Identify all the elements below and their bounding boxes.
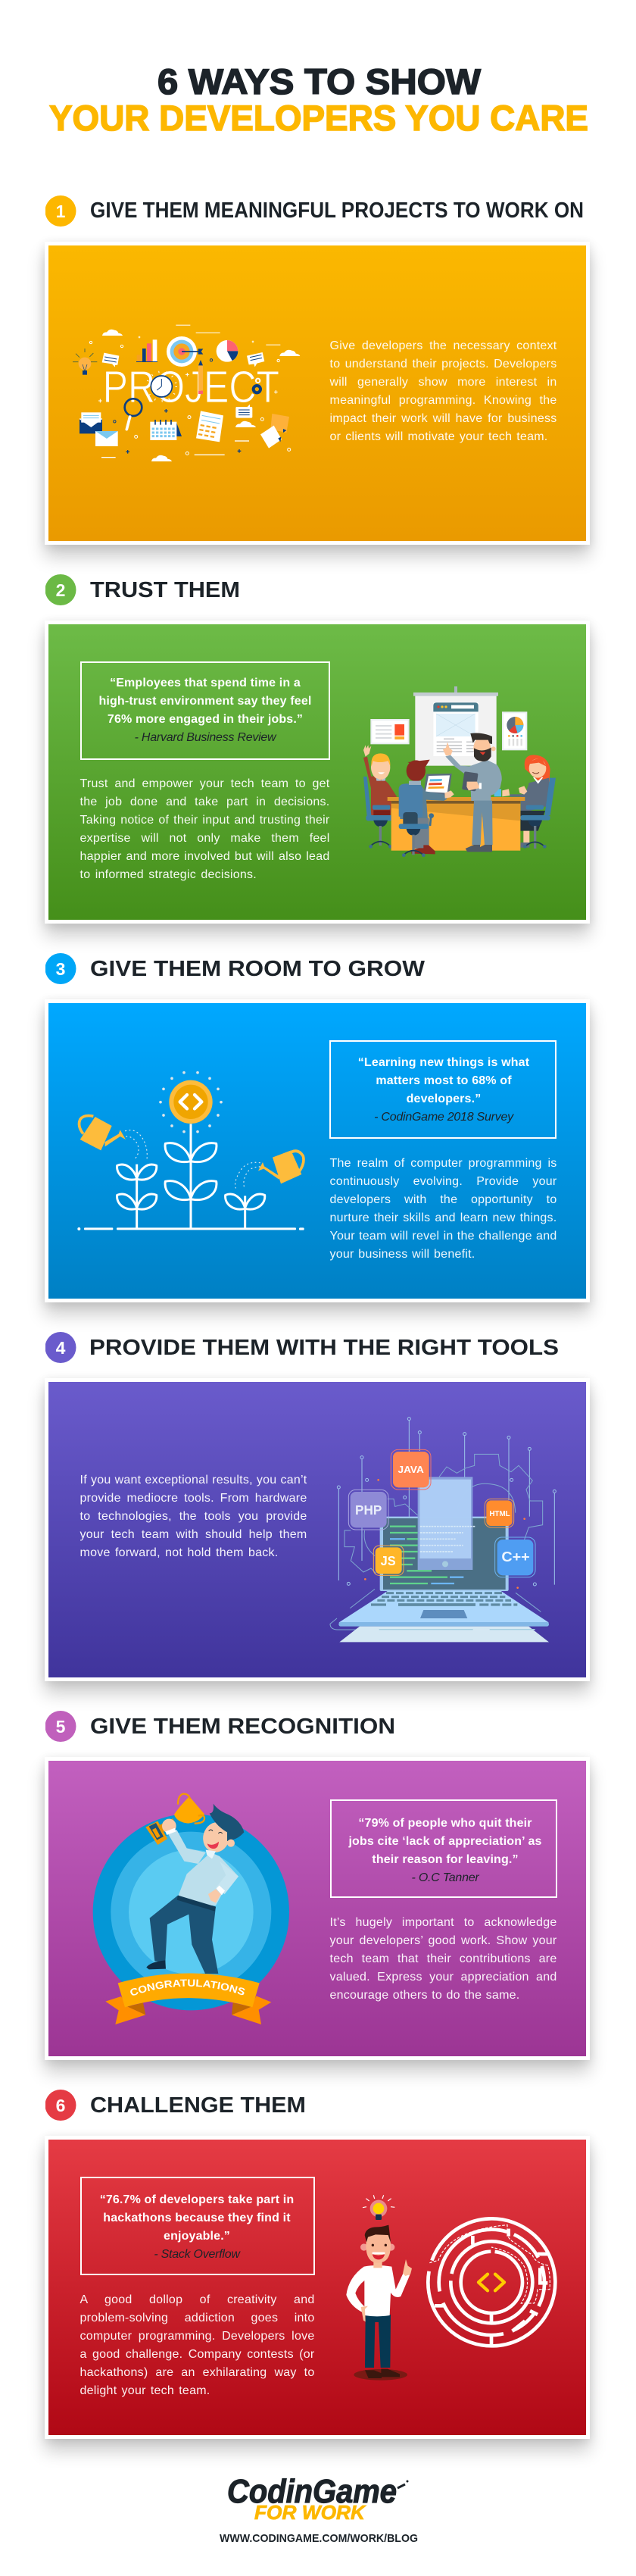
body text 1: meaningful programming. Knowing the	[330, 394, 557, 407]
panel 4: tools	[45, 1378, 590, 1681]
panel 1: projects	[45, 242, 590, 545]
heading 2	[45, 574, 240, 605]
pencil	[198, 360, 203, 394]
badges	[391, 1449, 431, 1490]
illustration: laptop and languages: PHP	[355, 1502, 382, 1518]
body text 1: Give developers the necessary context	[330, 339, 557, 352]
illustration: laptop and languages: HTML	[489, 1510, 510, 1518]
badges: JAVA	[398, 1465, 424, 1475]
code brackets	[479, 2274, 504, 2290]
phone	[418, 1477, 475, 1570]
heading 1: 1	[56, 202, 66, 221]
body text 4: move forward, not hold them back.	[80, 1546, 279, 1559]
laptop	[338, 1517, 549, 1642]
body text 4: your tech team with should help them	[80, 1528, 307, 1541]
body text 1	[330, 339, 557, 443]
illustration: trophy winner	[92, 1793, 289, 2024]
body text 2	[80, 777, 330, 881]
body text 3: continuously evolving. Provide your	[330, 1175, 557, 1188]
body text 4	[80, 1474, 307, 1559]
heading 2: TRUST THEM	[90, 578, 240, 602]
illustration: growing plants	[77, 1071, 305, 1230]
plants	[117, 1124, 265, 1228]
title: 6 WAYS TO SHOW	[157, 61, 482, 102]
tablet on desk	[423, 774, 452, 796]
bars	[136, 339, 157, 362]
footer logo	[220, 2473, 418, 2545]
footer logo: WWW.CODINGAME.COM/WORK/BLOG	[220, 2532, 418, 2545]
bulb	[73, 349, 97, 375]
quote 5: jobs cite ‘lack of appreciation’ as	[348, 1835, 542, 1848]
quote 6: “76.7% of developers take part in	[100, 2193, 294, 2206]
illustration: team meeting	[363, 686, 556, 857]
target	[167, 336, 203, 367]
quote 6: hackathons because they find it	[103, 2212, 291, 2224]
code lines	[390, 1527, 463, 1583]
quote 2: 76% more engaged in their jobs.”	[108, 713, 303, 726]
quote 5	[348, 1817, 542, 1884]
quote 6: enjoyable.”	[164, 2230, 230, 2243]
body text 2: happier and more involved but will also lead	[80, 850, 330, 863]
quote 2: high-trust environment say they feel	[98, 695, 312, 708]
quote 2: - Harvard Business Review	[135, 731, 276, 744]
ground	[77, 1227, 304, 1230]
body text 5: encourage others to do the same.	[330, 1989, 519, 2002]
gears	[254, 379, 260, 392]
quote 5: - O.C Tanner	[412, 1871, 479, 1884]
bubbles	[102, 353, 119, 367]
quote 6: - Stack Overflow	[154, 2248, 240, 2261]
body text 5: your developers’ good work. Show your	[330, 1934, 557, 1947]
body text 4: to technologies, the tools you provide	[80, 1510, 307, 1523]
body text 5: tech team that their contributions are	[330, 1952, 557, 1965]
body text 3: your business will benefit.	[330, 1248, 475, 1261]
document	[196, 411, 223, 442]
circuit lines	[330, 1418, 556, 1630]
envelopes	[80, 412, 118, 446]
body text 1: to understand their projects. Developers	[330, 358, 557, 370]
body text 1: or clients will motivate your tech team.	[330, 430, 548, 443]
desk	[388, 797, 525, 851]
seated person back	[399, 760, 454, 857]
heading 5: 5	[56, 1717, 66, 1737]
PROJECT word: PROJECT	[103, 361, 279, 412]
quote box 5	[330, 1799, 557, 1898]
ribbon: CONGRATULATIONS	[130, 1979, 245, 1996]
panel 5: recognition	[45, 1757, 590, 2060]
left person	[363, 745, 397, 849]
quote 3: developers.”	[407, 1093, 481, 1105]
bulb	[363, 2195, 394, 2220]
quote box 2	[80, 661, 330, 760]
heading 3: 3	[56, 959, 65, 979]
heading 6: 6	[56, 2096, 65, 2115]
quote 3: “Learning new things is what	[358, 1056, 529, 1069]
body text 5: valued. Express your appreciation and	[330, 1971, 557, 1984]
left watering can	[80, 1116, 126, 1150]
backdrop circles	[93, 1814, 289, 2010]
body text 3: nurture their skills and learn new things.	[330, 1211, 557, 1224]
body text 3: Your team will revel in the challenge and	[330, 1230, 557, 1243]
quote 5: their reason for leaving.”	[372, 1853, 519, 1866]
heading 4	[45, 1332, 559, 1363]
illustration: laptop and languages: C++	[501, 1549, 530, 1565]
maze	[410, 2201, 573, 2364]
quote 3: - CodinGame 2018 Survey	[374, 1111, 513, 1124]
body text 6: problem-solving addiction goes into	[80, 2312, 315, 2324]
notes	[260, 414, 289, 449]
heading 6: CHALLENGE THEM	[90, 2093, 306, 2118]
heading 2: 2	[56, 580, 65, 600]
heading 3	[45, 953, 426, 984]
right pie paper	[502, 711, 527, 750]
body text 1: will generally show more interest in	[330, 376, 557, 389]
quote box 3	[329, 1040, 556, 1139]
quote 2: “Employees that spend time in a	[110, 677, 301, 689]
left chart paper	[370, 719, 410, 744]
heading 5: GIVE THEM RECOGNITION	[90, 1715, 395, 1739]
quote 3	[358, 1056, 529, 1124]
body text 6: a good challenge. Company contests (or	[80, 2348, 315, 2361]
body text 6: computer programming. Developers love	[80, 2330, 315, 2343]
flower head	[169, 1080, 213, 1124]
clock	[147, 372, 176, 401]
illustration: project word cloud	[73, 324, 300, 461]
body text 2: expertise will not only make them feel	[80, 832, 330, 845]
footer logo: FOR WORK	[254, 2501, 366, 2524]
panel 6: challenge	[45, 2136, 590, 2439]
right person	[494, 755, 556, 849]
body text 2: Trust and empower your tech team to get	[80, 777, 330, 790]
heading 3: GIVE THEM ROOM TO GROW	[90, 957, 426, 981]
ribbon	[106, 1973, 271, 2024]
body text 6	[80, 2293, 315, 2397]
projection screen	[413, 686, 498, 766]
pie	[217, 340, 238, 362]
magnifier	[125, 399, 142, 430]
body text 2: the job done and take part in decisions.	[80, 796, 330, 808]
body text 6: A good dollop of creativity and	[80, 2293, 315, 2306]
body text 6: hackathons) are an exhilarating way to	[80, 2366, 315, 2379]
illustration: laptop and languages: JS	[381, 1553, 396, 1568]
body text 5: It’s hugely important to acknowledge	[330, 1916, 557, 1929]
quote box 6	[80, 2177, 315, 2275]
body text 4: If you want exceptional results, you can’t	[80, 1474, 307, 1487]
quote 6	[100, 2193, 294, 2261]
body text 3	[330, 1157, 557, 1261]
body text 4: provide mediocre tools. From hardware	[80, 1492, 307, 1505]
calendar	[150, 420, 182, 440]
quote 3: matters most to 68% of	[376, 1074, 512, 1087]
panel 2: trust	[45, 621, 590, 924]
panel 3: grow	[45, 999, 590, 1302]
man	[146, 1804, 244, 1974]
man	[346, 2225, 412, 2381]
quote 2	[98, 677, 312, 744]
footer logo: CodinGame	[227, 2473, 397, 2510]
body text 2: Taking notice of their input and trusting their	[80, 814, 330, 827]
body text 3: The realm of computer programming is	[330, 1157, 557, 1170]
illustration: man and maze	[346, 2195, 557, 2381]
trophy	[145, 1794, 204, 1845]
quote 5: “79% of people who quit their	[358, 1817, 532, 1830]
heading 4: 4	[56, 1338, 66, 1358]
body text 2: to informed strategic decisions.	[80, 868, 257, 881]
heading 5	[45, 1711, 395, 1742]
standing man	[443, 733, 502, 852]
heading 6	[45, 2090, 306, 2121]
heading 4: PROVIDE THEM WITH THE RIGHT TOOLS	[89, 1336, 559, 1360]
body text 5	[330, 1916, 557, 2002]
body text 6: delight your tech team.	[80, 2384, 210, 2397]
illustration: laptop and languages	[330, 1417, 556, 1643]
right watering can	[258, 1150, 304, 1183]
body text 3: developers with the opportunity to	[330, 1193, 557, 1206]
body text 1: impact their work will have for business	[330, 412, 557, 425]
title	[48, 61, 588, 136]
